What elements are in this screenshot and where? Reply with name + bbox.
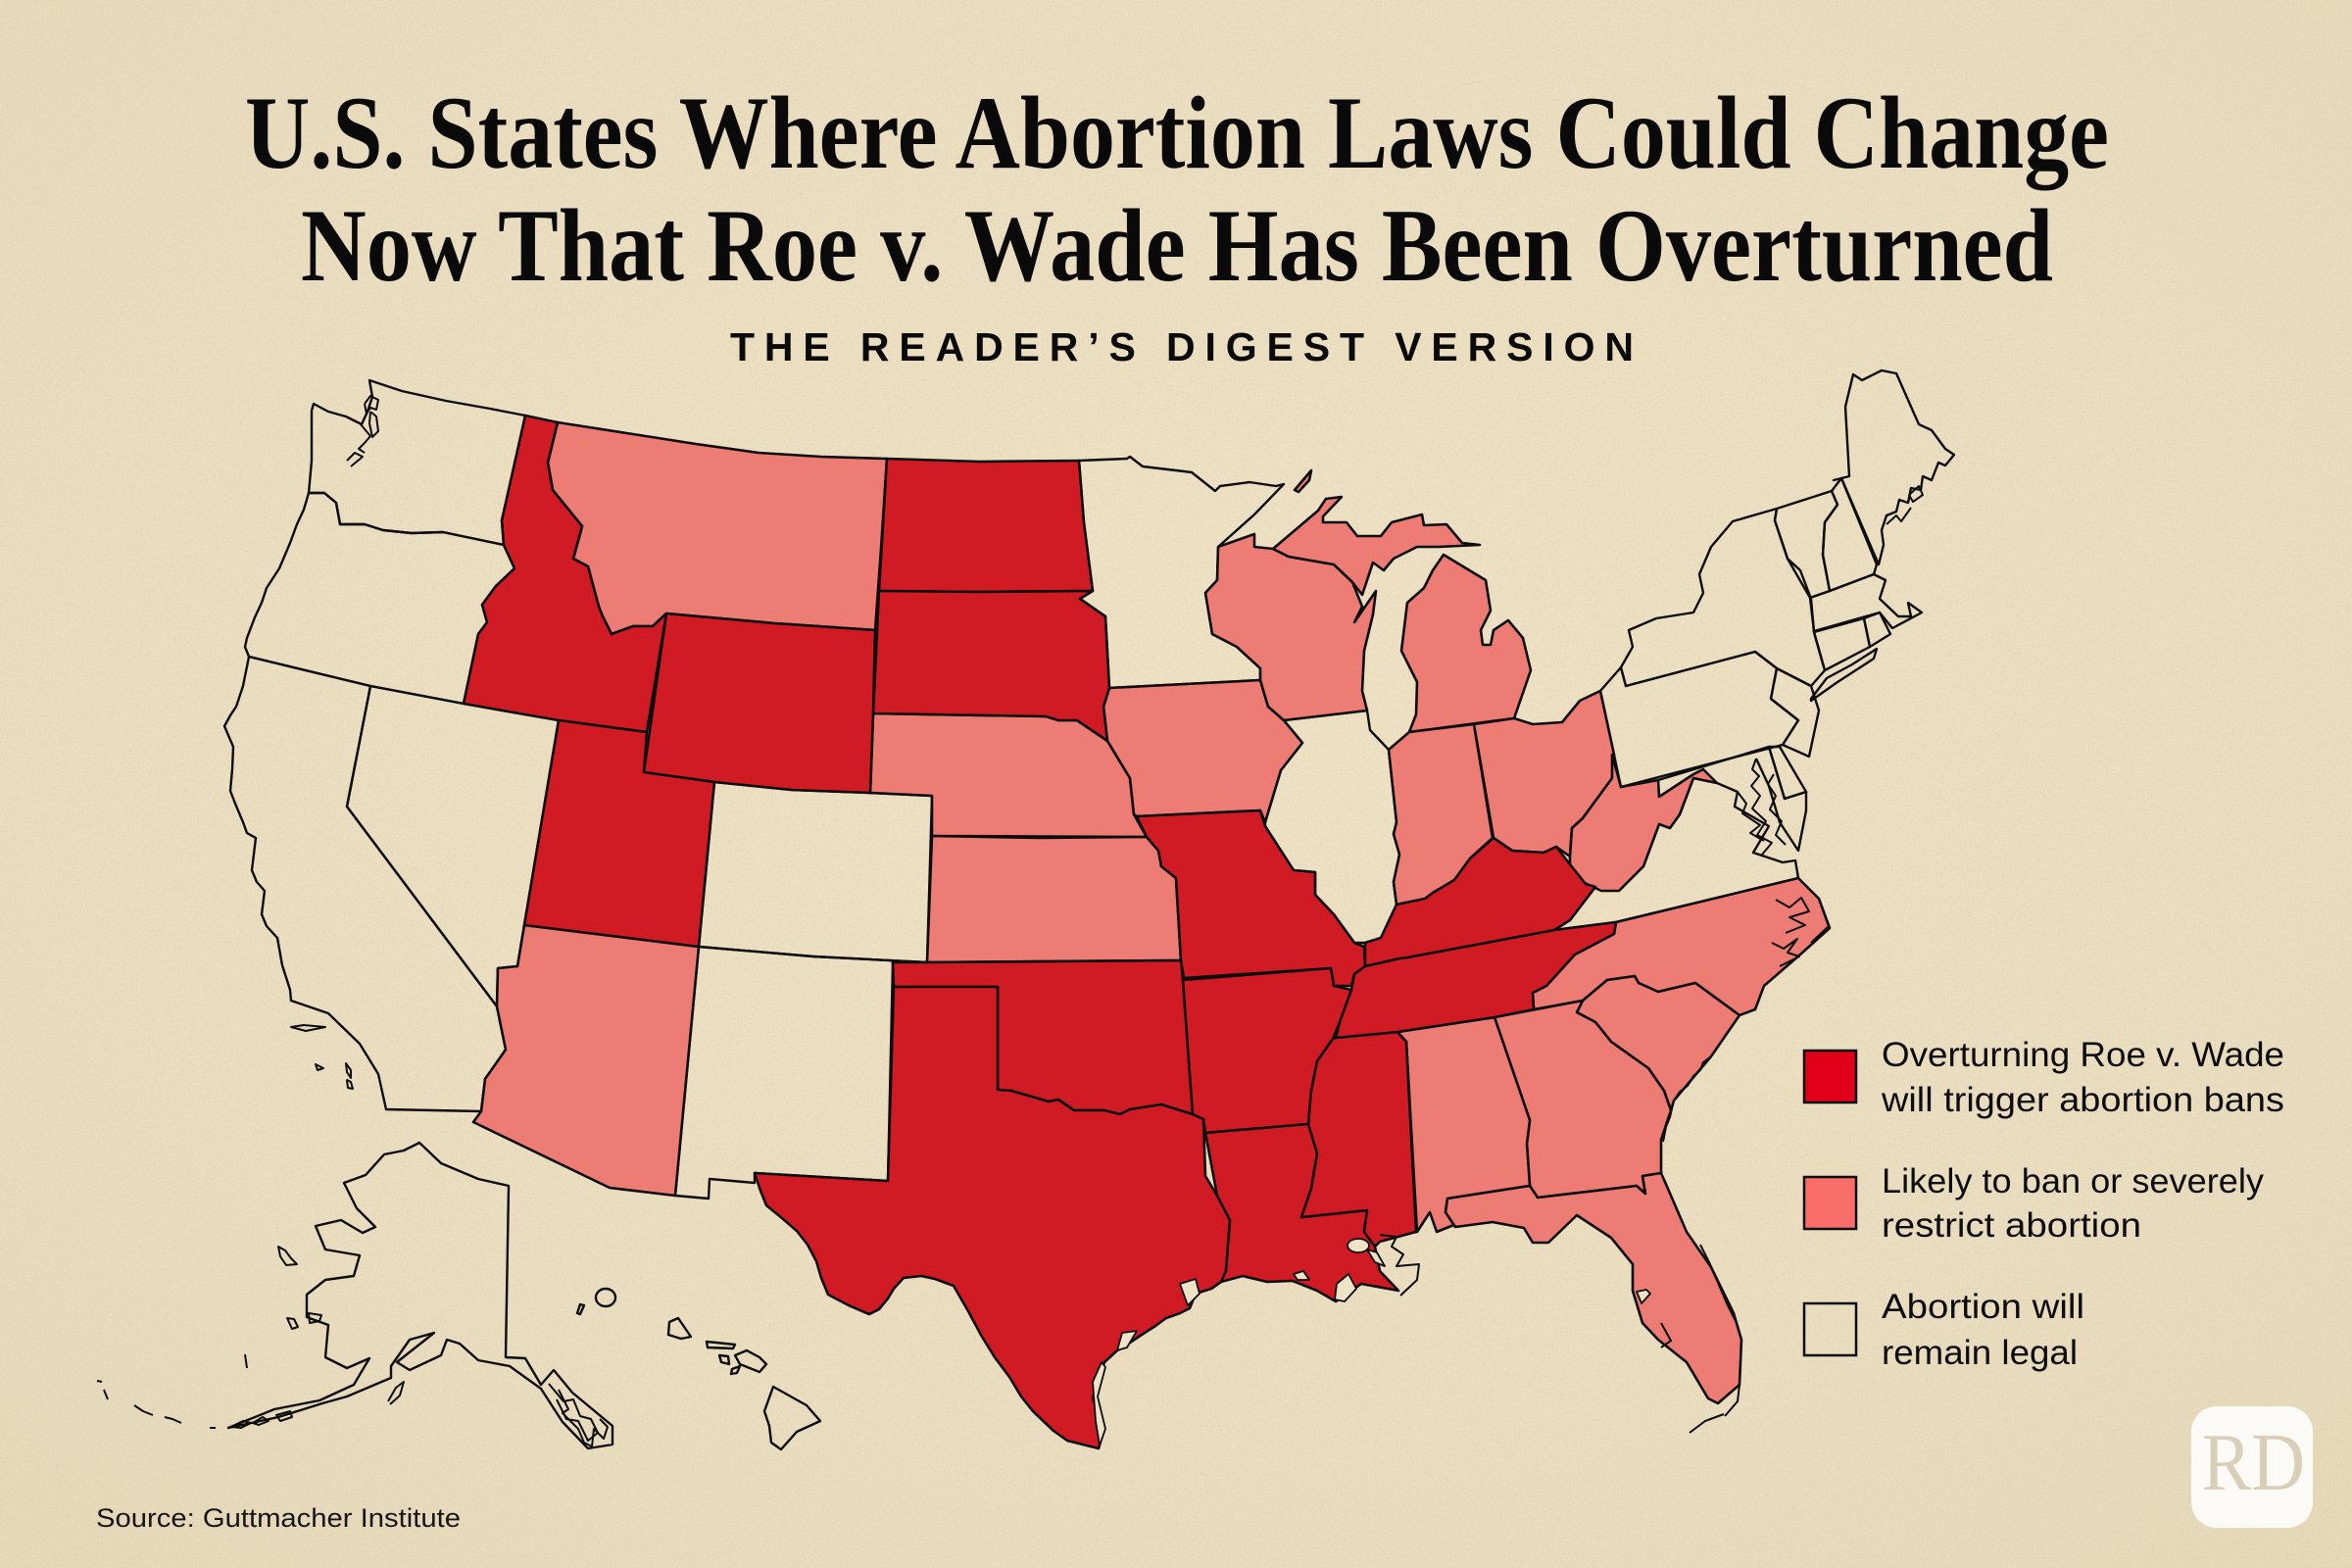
title: [245, 75, 2109, 303]
state: Kentucky: [1365, 838, 1595, 966]
state: North Dakota: [879, 459, 1093, 592]
state: Minnesota: [1079, 457, 1284, 688]
state: Delaware: [1769, 747, 1806, 799]
state: Montana: [548, 422, 887, 634]
state: Tennessee: [1336, 922, 1616, 1038]
state: Virginia: [1554, 778, 1798, 930]
state: Washington: [309, 380, 525, 545]
state: Michigan, Lower Peninsula: [1401, 555, 1531, 732]
state: Ohio: [1474, 691, 1614, 857]
coastal detail: Puget Sound: [347, 396, 378, 466]
legend item: remain legal: Abortion will: [1882, 1288, 2084, 1326]
coastal detail: Texas bays: [1093, 1279, 1200, 1446]
state: Mississippi: [1301, 1032, 1416, 1247]
state: Florida: [1446, 1173, 1741, 1403]
state: Maine: [1834, 370, 1954, 564]
state: Michigan, Upper Peninsula: [1273, 497, 1480, 595]
state: Oregon: [245, 493, 514, 704]
state: Louisiana: [1205, 1124, 1398, 1301]
coastal detail: North Carolina sounds: [1772, 898, 1829, 966]
state: Michigan, Isle Royale: [1295, 470, 1311, 492]
state: Hawaii: [577, 1289, 820, 1449]
state: Colorado: [699, 782, 932, 962]
coastal detail: Georgia and South Carolina sea islands: [1663, 1056, 1711, 1142]
logo: RD badge: [2191, 1406, 2313, 1528]
state: South Dakota: [873, 591, 1109, 741]
state: Indiana: [1389, 724, 1493, 905]
state: Alabama: [1397, 1017, 1530, 1232]
subtitle: THE READER’S DIGEST VERSION: [730, 324, 1634, 369]
state: New York: [1621, 509, 1825, 686]
title: Now That Roe v. Wade Has Been Overturned: [301, 188, 2053, 303]
legend item: likely to ban: restrict abortion: [1882, 1206, 2141, 1245]
state: Nevada: [347, 686, 559, 1006]
state: New York, Long Island: [1811, 649, 1877, 701]
logo: RD badge: RD: [2202, 1417, 2305, 1508]
coastal detail: California islands: [291, 1025, 353, 1089]
coastal detail: Maine islands: [1886, 486, 1923, 524]
state: Georgia: [1494, 1001, 1671, 1198]
legend item: trigger bans: will trigger abortion bans: [1881, 1081, 2284, 1119]
state: Idaho: [464, 416, 666, 732]
state: New Hampshire: [1823, 478, 1877, 591]
state: Rhode Island: [1864, 612, 1890, 647]
state: Alaska: [97, 1143, 612, 1448]
state: Oklahoma: [893, 960, 1193, 1114]
state: New Jersey: [1771, 668, 1819, 757]
legend: [1804, 1036, 2284, 1372]
state: Vermont: [1775, 491, 1838, 598]
state: Arizona: [473, 925, 699, 1196]
state: Iowa: [1103, 680, 1302, 822]
state: South Carolina: [1577, 976, 1740, 1110]
state: North Carolina: [1533, 878, 1830, 1015]
legend item: remain legal: [1804, 1288, 2084, 1372]
state: Maryland: [1658, 747, 1806, 851]
map of U.S. states: [97, 370, 1954, 1449]
state: Missouri: [1137, 810, 1365, 986]
state: Pennsylvania: [1600, 652, 1798, 787]
state: California: [224, 657, 506, 1111]
state: Nebraska: [870, 713, 1147, 837]
state: New Mexico: [675, 947, 927, 1199]
legend item: likely to ban: [1804, 1162, 2265, 1245]
coastal detail: Louisiana bays and delta: [1294, 1235, 1419, 1301]
state: Kansas: [927, 836, 1181, 962]
title: U.S. States Where Abortion Laws Could Change: [245, 75, 2109, 190]
coastal detail: Chesapeake Bay: [1738, 759, 1786, 855]
state: Texas: [755, 987, 1230, 1448]
state: Wyoming: [644, 613, 875, 793]
coastal detail: Florida barrier islands: [1637, 1245, 1740, 1433]
legend item: likely to ban: Likely to ban or severely: [1882, 1162, 2265, 1200]
state: Connecticut: [1814, 618, 1870, 670]
legend item: remain legal: remain legal: [1882, 1334, 2078, 1372]
state: Arkansas: [1183, 968, 1351, 1133]
state: Utah: [524, 720, 714, 947]
state: Wisconsin: [1205, 534, 1376, 720]
source note: Source: Guttmacher Institute: [96, 1503, 461, 1533]
state: Massachusetts: [1810, 574, 1922, 631]
state: West Virginia: [1570, 755, 1717, 891]
state: Illinois: [1265, 710, 1399, 943]
legend item: trigger bans: [1804, 1036, 2284, 1119]
legend item: trigger bans: Overturning Roe v. Wade: [1882, 1036, 2284, 1074]
